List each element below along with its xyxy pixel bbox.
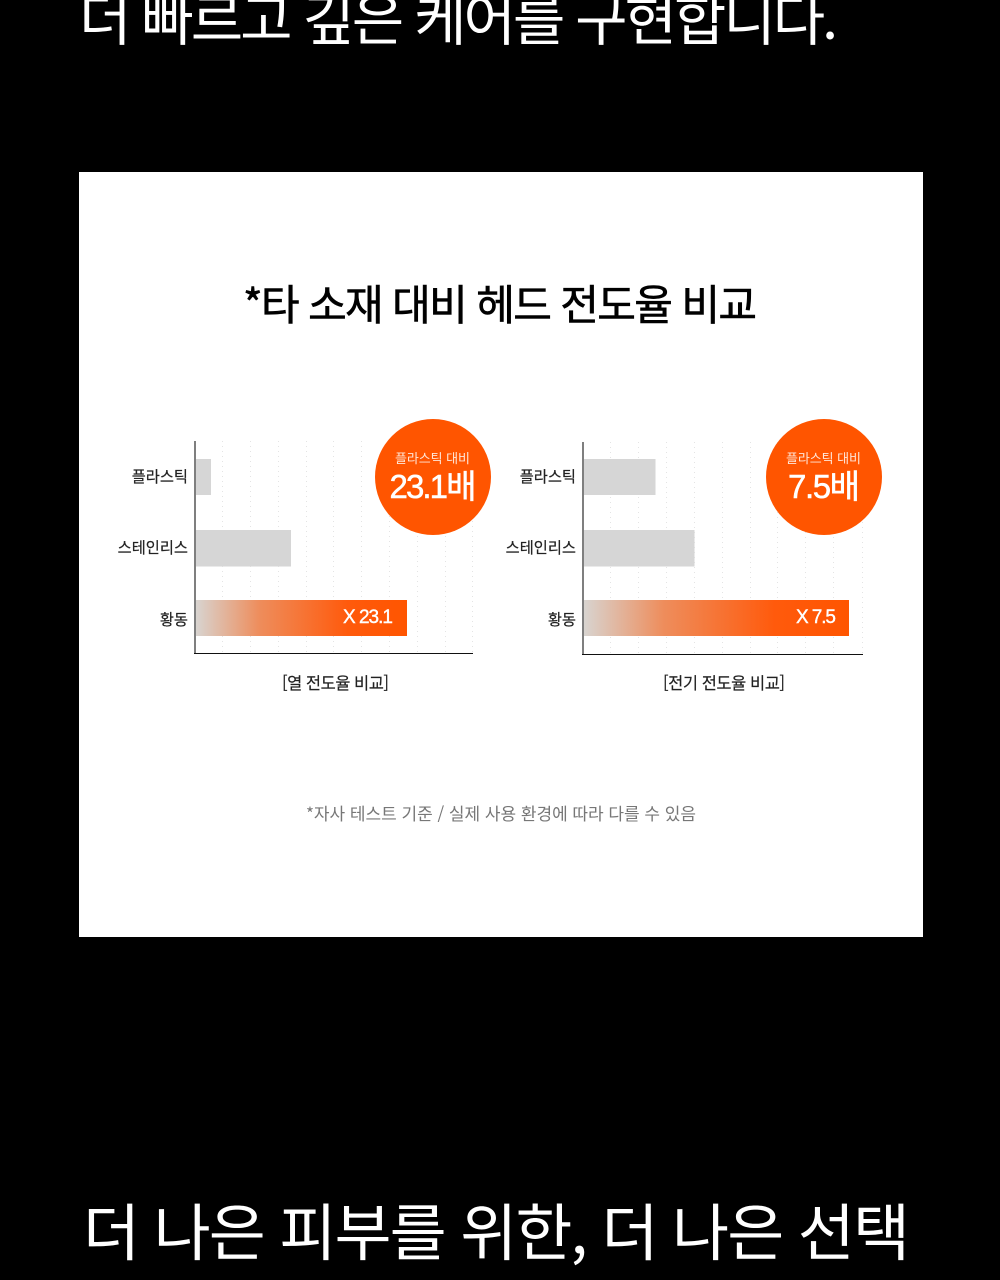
category labels: 황동 <box>548 608 576 630</box>
chart: electrical conductivity <box>506 419 882 694</box>
chart: thermal conductivity <box>118 419 491 694</box>
badge: 23.1x: 23.1배 <box>390 468 476 505</box>
y axis <box>194 441 196 654</box>
bar value: X 7.5 <box>796 607 836 628</box>
badge: 7.5x: 플라스틱 대비 <box>786 448 861 467</box>
bar: plastic <box>196 459 211 495</box>
bar: brass <box>584 600 849 636</box>
badge: 23.1x: 플라스틱 대비 <box>395 448 470 467</box>
badge: 7.5x <box>766 419 882 535</box>
badge: 7.5x: 7.5배 <box>788 468 860 505</box>
category labels: 플라스틱 <box>132 465 188 487</box>
chart caption: [전기 전도율 비교] <box>663 670 785 694</box>
bar value: X 23.1 <box>343 607 393 628</box>
bar: stainless <box>196 530 291 566</box>
x axis <box>582 654 863 656</box>
category labels: 황동 <box>160 608 188 630</box>
category labels <box>506 465 576 630</box>
y axis <box>582 442 584 655</box>
bar: brass <box>196 600 407 636</box>
badge: 23.1x <box>375 419 491 535</box>
category labels: 플라스틱 <box>520 465 576 487</box>
x axis <box>194 652 473 654</box>
category labels <box>118 465 188 630</box>
category labels: 스테인리스 <box>118 536 188 558</box>
category labels: 스테인리스 <box>506 536 576 558</box>
footnote: *자사 테스트 기준 / 실제 사용 환경에 따라 다를 수 있음 <box>306 800 696 825</box>
bottom heading: 더 나은 피부를 위한, 더 나은 선택 <box>83 1183 910 1273</box>
chart caption: [열 전도율 비교] <box>282 670 389 694</box>
bar: stainless <box>584 530 694 566</box>
panel: conductivity comparison <box>79 172 923 937</box>
bar: plastic <box>584 459 656 495</box>
panel title: *타 소재 대비 헤드 전도율 비교 <box>243 272 757 333</box>
